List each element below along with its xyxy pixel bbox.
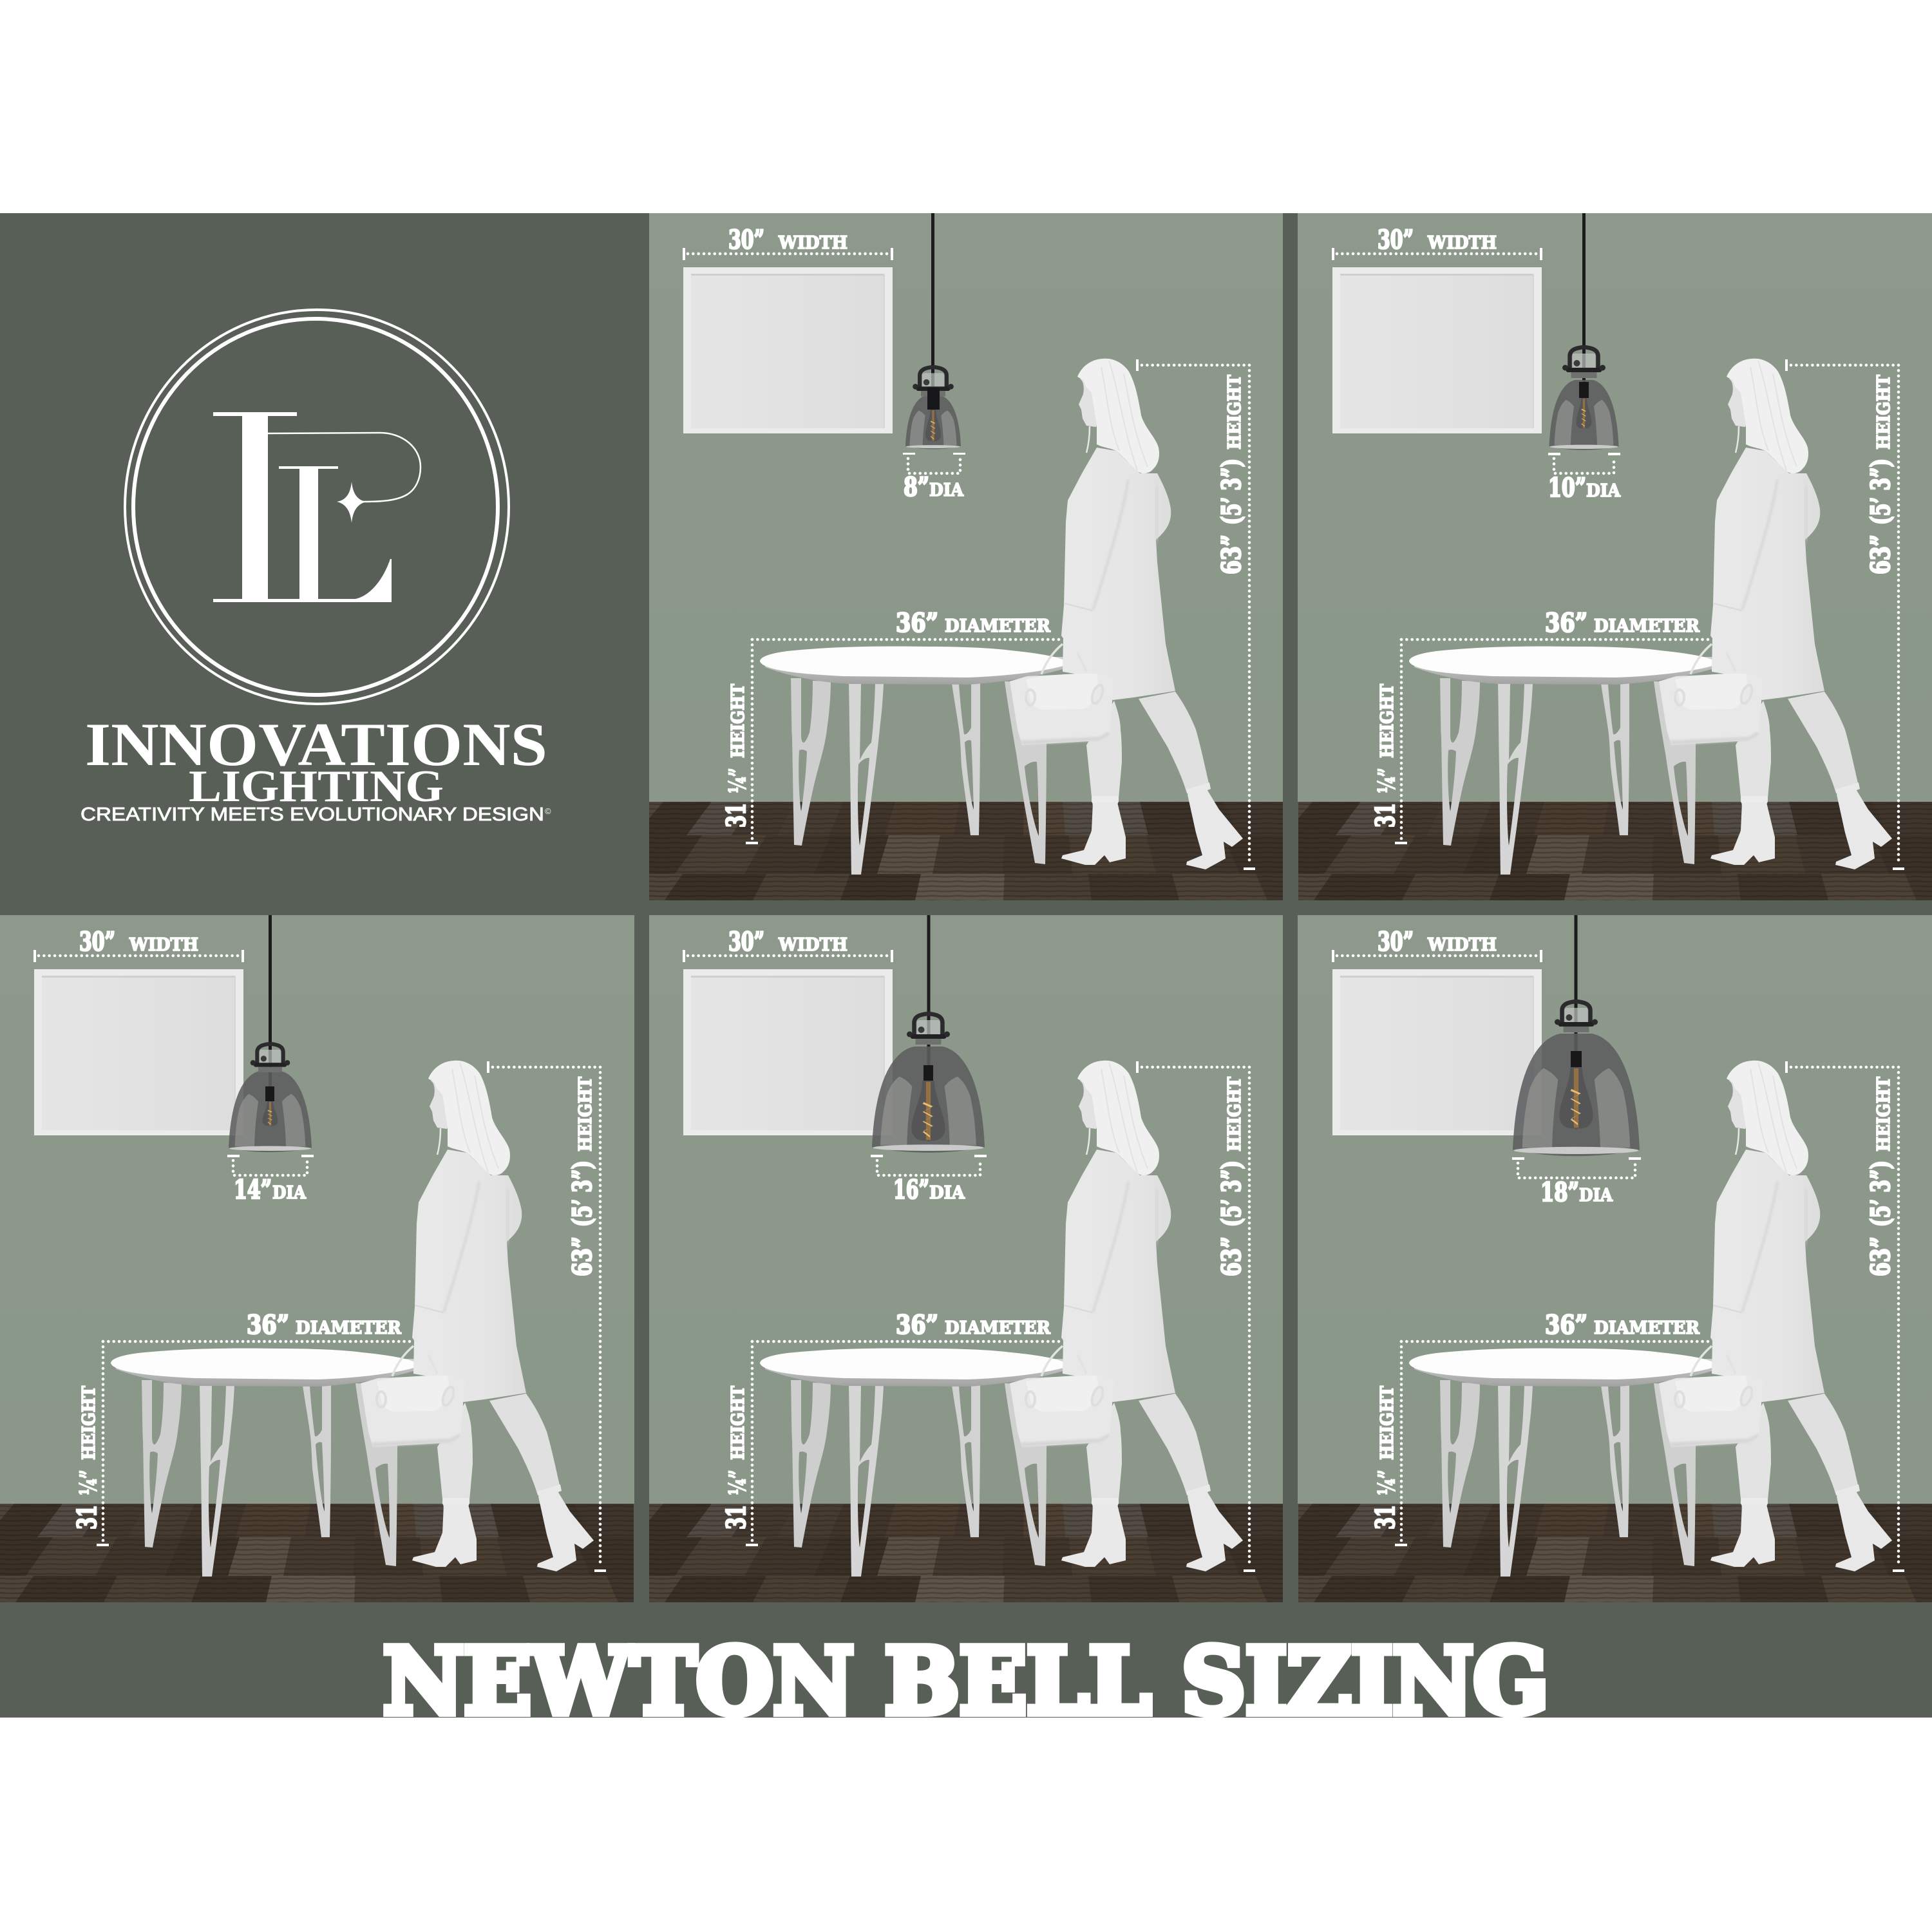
table diameter dimension: DIAMETER [296,1318,402,1338]
height dimension: (5’ 3”) [1866,459,1896,525]
pendant lamp 10 inch [1549,213,1619,450]
table [760,1349,1070,1577]
lamp diameter dimension 14 inch: DIA [272,1183,307,1203]
table height dimension: ¼” [724,1470,752,1495]
table [760,647,1070,875]
frame width dimension [683,225,893,260]
table [1409,647,1719,875]
frame width dimension: 30” [1378,225,1414,255]
panel: 10 inch pendant [1164,213,1932,900]
height dimension: 63” [1866,1236,1896,1276]
table diameter dimension: 36” [1545,608,1587,638]
panel: 14 inch pendant [0,915,734,1602]
height dimension [1785,359,1904,870]
wall [0,915,634,1504]
wall [1298,915,1932,1504]
height dimension [1136,1061,1255,1572]
lamp diameter dimension 16 inch [871,1155,987,1205]
logo: INNOVATIONS wordmark: INNOVATIONS [85,710,547,779]
frame width dimension [1332,927,1542,962]
frame width dimension: WIDTH [778,935,848,955]
woman figure [1010,1061,1243,1571]
height dimension [1785,1061,1904,1572]
dark backdrop band [0,213,1932,1718]
woman figure [1659,1061,1892,1571]
table height dimension [1370,639,1407,844]
table diameter dimension: 36” [896,1310,938,1340]
wall frame [1332,969,1542,1135]
table diameter dimension: DIAMETER [1594,1318,1700,1338]
wall frame [683,267,893,433]
table height dimension: ¼” [75,1470,102,1495]
lamp diameter dimension 10 inch: 10” [1548,473,1586,503]
table diameter dimension: DIAMETER [945,1318,1051,1338]
panel: 8 inch pendant [515,213,1383,900]
logo: tagline: © [545,806,551,816]
table height dimension: ¼” [1374,1470,1401,1495]
wall frame [34,969,243,1135]
table height dimension: ¼” [724,768,752,793]
table height dimension: 31 [721,1505,752,1530]
table height dimension [721,639,758,844]
table diameter dimension [752,608,1061,639]
lamp diameter dimension 8 inch [903,453,965,502]
table height dimension: 31 [72,1505,102,1530]
frame width dimension: WIDTH [1427,233,1497,253]
lamp diameter dimension 10 inch [1548,453,1621,503]
table height dimension: 31 [1370,1505,1401,1530]
table height dimension: HEIGHT [1378,1386,1397,1460]
lamp diameter dimension 8 inch: DIA [929,480,964,500]
logo: LIGHTING wordmark: LIGHTING [189,762,444,811]
floor [515,802,1383,900]
height dimension: (5’ 3”) [1866,1160,1896,1227]
lamp diameter dimension 16 inch: 16” [893,1175,929,1205]
title: NEWTON BELL SIZING [383,1629,1549,1735]
height dimension: 63” [1217,535,1247,574]
table diameter dimension: 36” [247,1310,289,1340]
table height dimension [1370,1341,1407,1546]
lamp diameter dimension 14 inch [227,1155,314,1205]
floor [0,1504,734,1602]
table height dimension [721,1341,758,1546]
floor [1164,802,1932,900]
floor [1164,1504,1932,1602]
woman figure [1659,359,1892,869]
pendant lamp 14 inch [229,915,312,1152]
table height dimension: 31 [1370,803,1401,828]
wall [649,915,1283,1504]
lamp diameter dimension 18 inch: 18” [1540,1177,1579,1208]
panel: 16 inch pendant [515,915,1383,1602]
table diameter dimension: DIAMETER [945,616,1051,636]
pendant lamp 16 inch [872,915,985,1153]
table diameter dimension [752,1310,1061,1341]
table [1409,1349,1719,1577]
height dimension: HEIGHT [1874,1077,1894,1151]
table height dimension: ¼” [1374,768,1401,793]
wall [649,213,1283,802]
table height dimension [72,1341,109,1546]
height dimension: HEIGHT [1874,375,1894,450]
table height dimension: HEIGHT [1378,684,1397,758]
wall frame [683,969,893,1135]
frame width dimension: 30” [728,225,764,255]
frame width dimension: 30” [79,927,115,957]
floor [515,1504,1383,1602]
wall [1298,213,1932,802]
height dimension: 63” [1217,1236,1247,1276]
pendant lamp 18 inch [1513,915,1640,1156]
height dimension: 63” [1866,535,1896,574]
height dimension: 63” [567,1236,598,1276]
table height dimension: HEIGHT [728,1386,748,1460]
height dimension: (5’ 3”) [567,1160,598,1227]
frame width dimension: WIDTH [129,935,198,955]
woman figure [1010,359,1243,869]
frame width dimension [683,927,893,962]
woman figure [361,1061,594,1571]
height dimension: (5’ 3”) [1217,459,1247,525]
height dimension [1136,359,1255,870]
frame width dimension: 30” [728,927,764,957]
frame width dimension [1332,225,1542,260]
table diameter dimension: DIAMETER [1594,616,1700,636]
lamp diameter dimension 8 inch: 8” [904,472,929,502]
panel: 18 inch pendant [1164,915,1932,1602]
table diameter dimension [1401,608,1710,639]
lamp diameter dimension 14 inch: 14” [234,1175,272,1205]
height dimension: HEIGHT [576,1077,596,1151]
logo: double ring [125,310,509,704]
table diameter dimension [103,1310,412,1341]
table height dimension: HEIGHT [79,1386,99,1460]
lamp diameter dimension 18 inch: DIA [1579,1186,1613,1206]
logo panel [80,310,551,825]
pendant lamp 8 inch [905,213,961,449]
height dimension: (5’ 3”) [1217,1160,1247,1227]
table diameter dimension: 36” [1545,1310,1587,1340]
frame width dimension: WIDTH [778,233,848,253]
wall frame [1332,267,1542,433]
frame width dimension: WIDTH [1427,935,1497,955]
logo: tagline: CREATIVITY MEETS EVOLUTIONARY DESIGN [80,804,544,825]
table height dimension: HEIGHT [728,684,748,758]
table height dimension: 31 [721,803,752,828]
height dimension: HEIGHT [1225,1077,1245,1151]
height dimension: HEIGHT [1225,375,1245,450]
lamp diameter dimension 18 inch [1512,1157,1641,1208]
logo: monogram [213,412,421,602]
frame width dimension [33,927,244,962]
table diameter dimension: 36” [896,608,938,638]
table diameter dimension [1401,1310,1710,1341]
table [111,1349,421,1577]
lamp diameter dimension 16 inch: DIA [929,1183,965,1203]
lamp diameter dimension 10 inch: DIA [1586,481,1621,501]
frame width dimension: 30” [1378,927,1414,957]
height dimension [487,1061,606,1572]
